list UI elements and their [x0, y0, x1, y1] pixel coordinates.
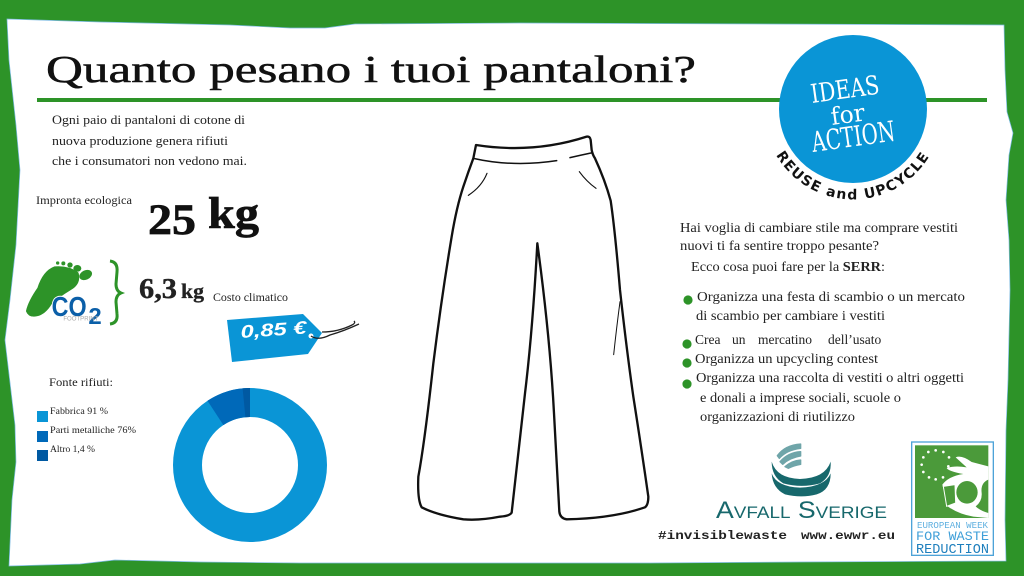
logo: Avfall Sverige	[716, 444, 887, 524]
figure: 6,3 kg: 6,3	[139, 274, 177, 305]
right intro text	[680, 220, 958, 274]
figure: 6,3 kg	[139, 274, 205, 305]
price tag: 0,85 €	[240, 317, 308, 342]
action list: Organizza una festa di scambio o un mercato	[697, 289, 965, 304]
icon: CO2 footprint: 2	[88, 303, 102, 329]
intro text	[52, 112, 247, 168]
right intro text: Hai voglia di cambiare stile ma comprare vestiti	[680, 220, 958, 235]
chart legend: Altro 1,4 %	[50, 445, 95, 455]
intro text: che i consumatori non vedono mai.	[52, 153, 247, 168]
action list: mercatino	[758, 332, 812, 347]
badge: ideas for action: for	[829, 98, 867, 131]
action list: un	[732, 332, 746, 347]
action list: Organizza una raccolta di vestiti o altri oggetti	[696, 370, 964, 385]
logo: European Week for Waste Reduction: FOR WASTE	[916, 529, 989, 544]
right intro text: Ecco cosa puoi fare per la SERR:	[691, 259, 885, 274]
legend title: Fonte rifiuti:	[49, 375, 113, 389]
icon: curly brace	[110, 261, 121, 324]
action list: Organizza un upcycling contest	[695, 351, 878, 366]
figure: 25 kg	[148, 189, 259, 244]
curved caption: reuse and upcycle: REUSE and UPCYCLE	[776, 150, 928, 200]
logo: European Week for Waste Reduction: REDUCTION	[916, 542, 989, 558]
hashtag: #invisiblewaste	[658, 529, 787, 543]
icon: CO2 footprint: FOOTPRINT	[63, 316, 99, 322]
intro text: nuova produzione genera rifiuti	[52, 133, 228, 148]
logo: European Week for Waste Reduction: EUROPEAN WEEK	[917, 521, 989, 531]
label: costo climatico: Costo climatico	[213, 292, 288, 304]
action list: e donali a imprese sociali, scuole o	[700, 390, 901, 405]
figure: 6,3 kg: kg	[181, 279, 205, 303]
action list	[682, 289, 965, 424]
title rule	[37, 98, 987, 102]
label: impronta ecologica: Impronta ecologica	[36, 195, 132, 207]
action list: Crea	[695, 332, 720, 347]
intro text: Ogni paio di pantaloni di cotone di	[52, 112, 245, 127]
trousers illustration	[418, 137, 648, 520]
logo: Avfall Sverige: Avfall Sverige	[716, 497, 887, 524]
action list: dell’usato	[828, 332, 881, 347]
right intro text: nuovi ti fa sentire troppo pesante?	[680, 238, 879, 253]
action list: organizzazioni di riutilizzo	[700, 409, 855, 424]
icon: CO2 footprint: CO	[52, 291, 87, 322]
chart legend	[37, 407, 136, 461]
action list: di scambio per cambiare i vestiti	[696, 308, 885, 323]
chart legend: Parti metalliche 76%	[50, 426, 136, 436]
title: Quanto pesano i tuoi pantaloni?	[46, 49, 696, 91]
price tag	[227, 314, 359, 362]
figure: 25 kg: kg	[208, 189, 259, 238]
donut chart	[188, 388, 312, 528]
icon: CO2 footprint	[27, 261, 102, 329]
badge: ideas for action	[779, 35, 927, 183]
figure: 25 kg: 25	[148, 197, 196, 244]
logo: European Week for Waste Reduction	[912, 442, 993, 558]
chart legend: Fabbrica 91 %	[50, 407, 108, 417]
website: www.ewwr.eu	[801, 529, 895, 543]
badge: ideas for action: IDEAS	[809, 71, 881, 110]
badge: ideas for action: ACTION	[809, 115, 897, 159]
